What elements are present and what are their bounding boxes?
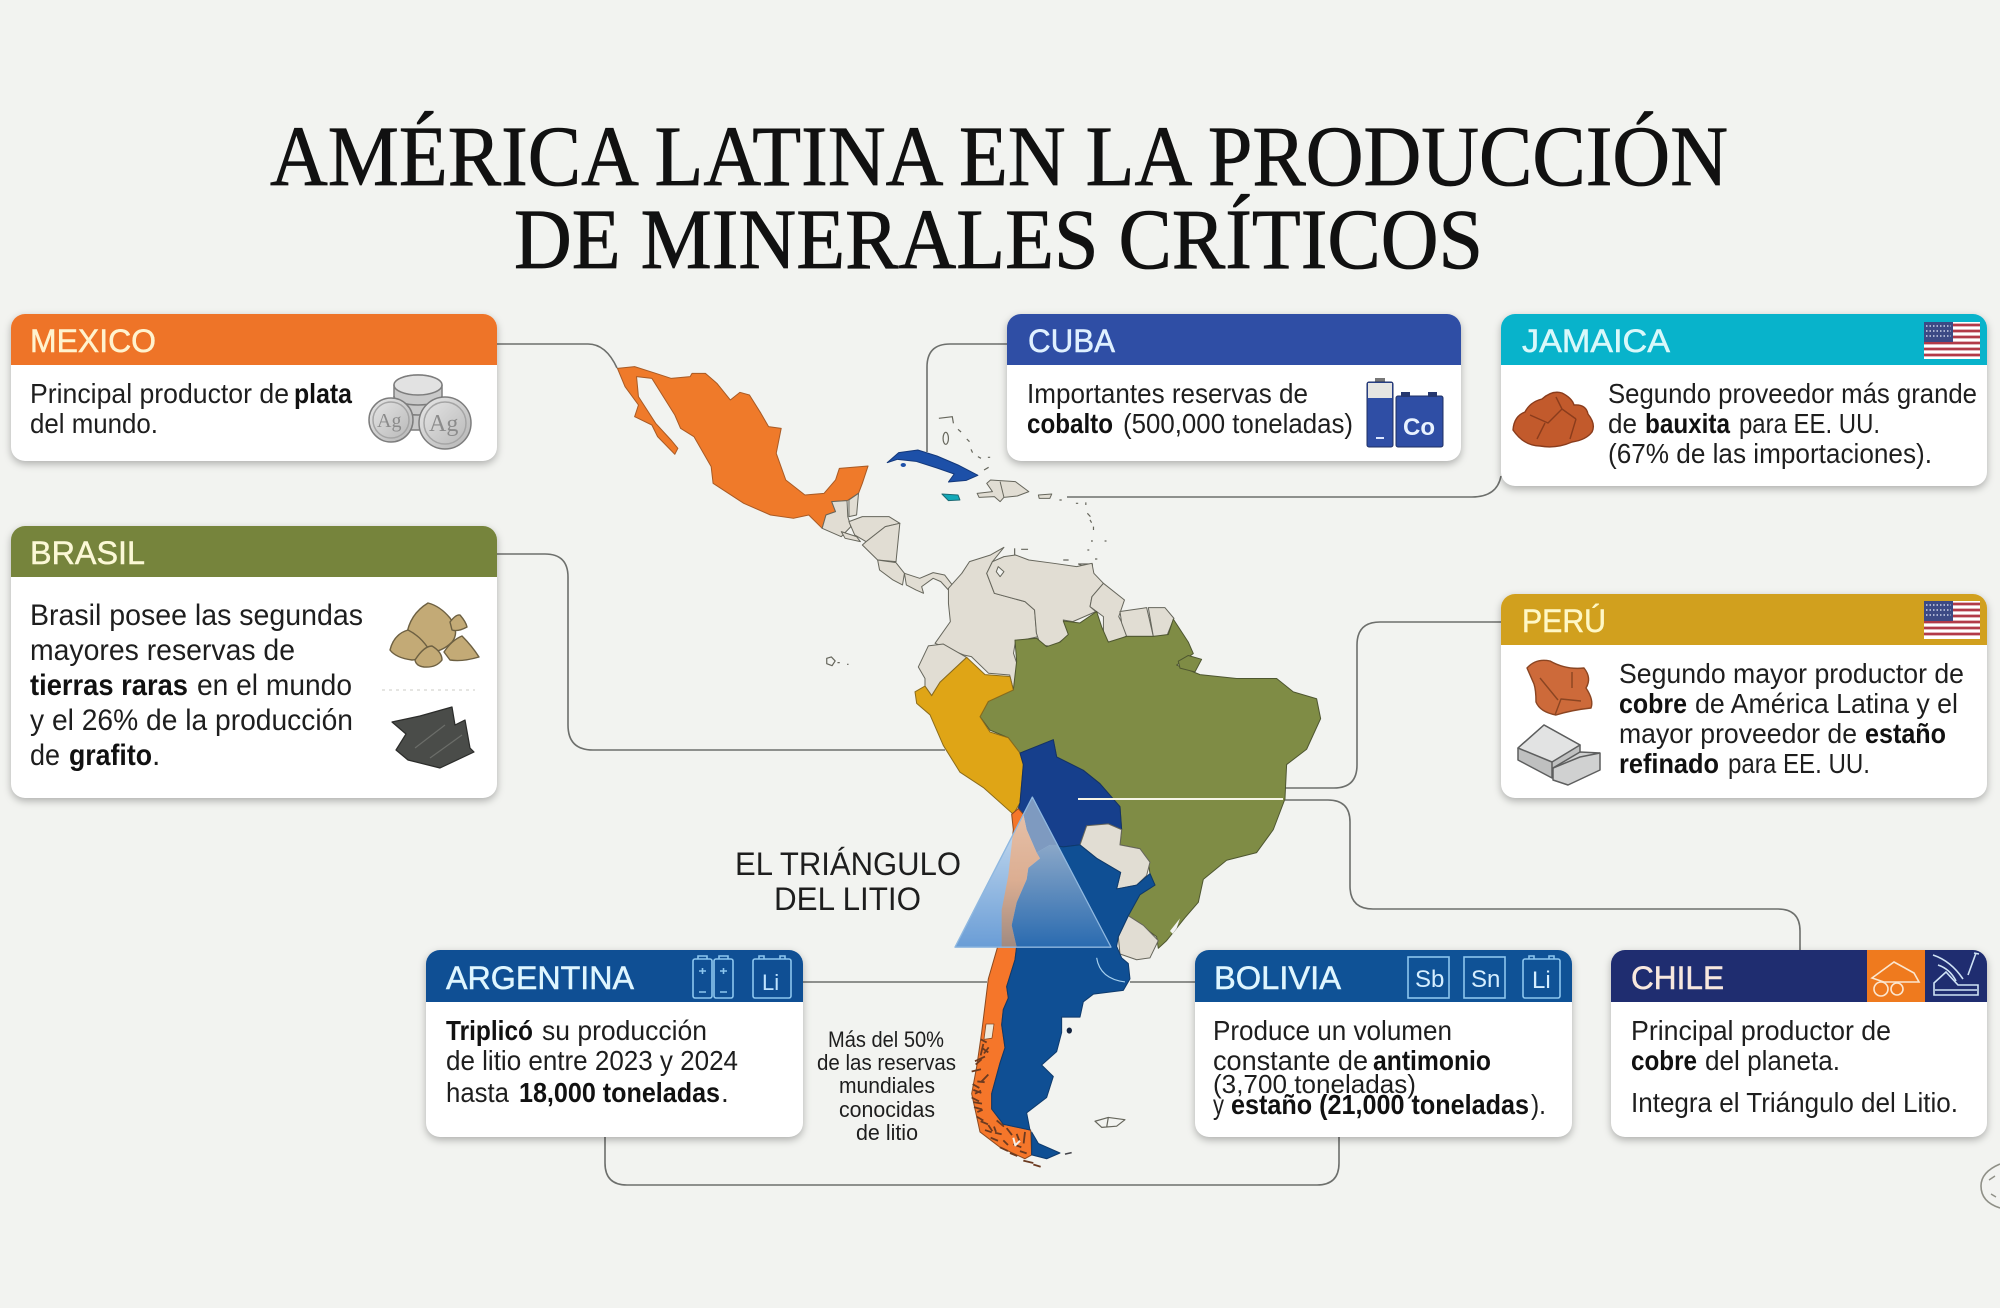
text: Chile: Principal productor de [1631, 1015, 1891, 1046]
icon: batteries [693, 956, 733, 998]
text: Brasil: de [30, 739, 60, 772]
text: Mexico: del mundo. [30, 408, 158, 439]
label: El Triángulo del Litio: DEL LITIO [774, 881, 921, 917]
note: lithium reserves: conocidas [839, 1097, 935, 1122]
heading: Brasil: BRASIL [30, 535, 145, 571]
icon: antimony [1408, 957, 1449, 998]
panel: Bolivia [1195, 950, 1572, 1137]
text: Bolivia: antimonio [1373, 1045, 1491, 1076]
note: lithium reserves: mundiales [839, 1073, 935, 1098]
text: Chile: cobre [1631, 1045, 1697, 1076]
text: Bolivia: estaño (21,000 toneladas [1231, 1089, 1529, 1120]
panel: Chile [1611, 950, 1987, 1137]
heading: Argentina: ARGENTINA [446, 960, 635, 996]
icon: cobalt batteries [1367, 378, 1443, 447]
Brazil [980, 611, 1321, 948]
Cuba [887, 450, 978, 482]
icon: lithium [1523, 956, 1560, 998]
title: AMÉRICA LATINA EN LA PRODUCCIÓN [270, 108, 1728, 204]
panel: Mexico [11, 314, 497, 461]
white overlay line on map [1078, 798, 1283, 800]
text: Perú [1619, 658, 1964, 779]
text: Mexico [30, 378, 352, 439]
text: Jamaica: bauxita [1645, 408, 1730, 439]
note: lithium reserves: Más del 50% [828, 1027, 944, 1052]
icon: silver coins: Ag [377, 410, 401, 432]
text: Mexico: plata [294, 378, 352, 409]
heading: Jamaica: JAMAICA [1522, 323, 1671, 359]
text: Perú: mayor proveedor de [1619, 718, 1857, 749]
text: Chile: Integra el Triángulo del Litio. [1631, 1087, 1958, 1118]
Chile [972, 809, 1040, 1159]
text: Argentina [446, 1015, 738, 1108]
text: Brasil: Brasil posee las segundas [30, 599, 363, 632]
text: Brasil: y el 26% de la producción [30, 704, 353, 737]
note: lithium reserves: de las reservas [817, 1050, 956, 1075]
title [270, 108, 1728, 287]
text: Brasil: en el mundo [197, 669, 352, 702]
text: Bolivia: Produce un volumen [1213, 1015, 1452, 1046]
icon: US flag [1924, 322, 1980, 359]
title: DE MINERALES CRÍTICOS [514, 191, 1483, 287]
Jamaica [942, 494, 960, 501]
panel: Cuba [1007, 314, 1461, 461]
note: lithium reserves: de litio [856, 1120, 918, 1145]
text: Mexico: Principal productor de [30, 378, 289, 409]
text: Cuba: Importantes reservas de [1027, 378, 1308, 409]
text: Argentina: de litio entre 2023 y 2024 [446, 1045, 738, 1076]
map: South America [915, 608, 1321, 1167]
text: Brasil: tierras raras [30, 669, 188, 702]
icon: antimony: Sb [1415, 966, 1444, 993]
Suriname, French Guiana, Ecuador [918, 608, 1174, 696]
icon: copper pile on orange [1867, 950, 1925, 1002]
text: Perú: para EE. UU. [1728, 748, 1870, 779]
text: Bolivia [1213, 1015, 1546, 1120]
panel: Argentina [426, 950, 803, 1137]
text: Jamaica: de [1608, 408, 1637, 439]
icon: tin: Sn [1471, 966, 1500, 993]
text: Jamaica: para EE. UU. [1739, 408, 1880, 439]
icon: lithium battery: Li [762, 970, 779, 995]
connector lines [497, 344, 1800, 1185]
icon: mining pickaxe [1933, 953, 1979, 995]
heading: Chile: CHILE [1631, 960, 1724, 996]
Chile white sliver [984, 1024, 994, 1039]
label: El Triángulo del Litio [735, 846, 961, 917]
text: Bolivia: y [1213, 1089, 1224, 1120]
text: Jamaica: Segundo proveedor más grande [1608, 378, 1977, 409]
icon: rare earths [390, 603, 479, 667]
icon: cobalt batteries: Co [1403, 414, 1435, 441]
text: Argentina: . [721, 1077, 729, 1108]
Colombia, Venezuela, Guyana, Suriname [935, 547, 1128, 690]
text: Bolivia: (3,700 toneladas) [1213, 1069, 1416, 1099]
Chilean fjords [972, 1039, 1041, 1167]
text: Chile: del planeta. [1705, 1045, 1840, 1076]
icon: lithium: Li [1532, 967, 1551, 994]
text: Perú: de América Latina y el [1695, 688, 1958, 719]
panel: Brasil [11, 526, 497, 798]
text: Brasil [30, 599, 363, 772]
text: Argentina: su producción [542, 1015, 707, 1046]
Argentina [992, 845, 1155, 1130]
text: Argentina: hasta [446, 1077, 509, 1108]
text: Cuba [1027, 378, 1353, 439]
note: lithium reserves [817, 1027, 956, 1145]
text: Perú: refinado [1619, 748, 1719, 779]
panel: Perú [1501, 594, 1987, 798]
text: Argentina: Triplicó [446, 1015, 533, 1046]
icon: lithium battery [753, 956, 791, 998]
Bolivia [1018, 740, 1122, 853]
panel: Jamaica [1501, 314, 1987, 486]
text: Perú: estaño [1865, 718, 1946, 749]
heading: Cuba: CUBA [1028, 323, 1116, 359]
Bahamas and Antilles [827, 417, 1106, 666]
icon: silver coins [369, 375, 471, 449]
Peru [915, 657, 1023, 814]
Paraguay and Uruguay [1080, 824, 1158, 960]
text: Chile [1631, 1015, 1958, 1118]
text: Perú: cobre [1619, 688, 1687, 719]
label: El Triángulo del Litio: EL TRIÁNGULO [735, 846, 961, 882]
icon: partial corner seal [1981, 1164, 2000, 1208]
divider [382, 689, 475, 691]
icon: tin ingots [1518, 725, 1600, 785]
text: Perú: Segundo mayor productor de [1619, 658, 1964, 689]
Hispaniola and Puerto Rico [977, 480, 1052, 502]
Mexico [617, 367, 868, 528]
icon: graphite [392, 707, 474, 768]
heading: Mexico: MEXICO [30, 323, 156, 359]
icon: tin [1464, 957, 1505, 998]
Central America [822, 493, 952, 593]
heading: Bolivia: BOLIVIA [1214, 960, 1342, 996]
icon: bauxite [1513, 392, 1593, 447]
icon: US flag [1924, 601, 1980, 639]
lithium triangle [955, 797, 1117, 947]
text: Brasil: grafito [69, 739, 152, 772]
text: Brasil: . [152, 739, 160, 772]
text: Argentina: 18,000 toneladas [519, 1077, 720, 1108]
text: Cuba: cobalto [1027, 408, 1113, 439]
text: Jamaica: (67% de las importaciones). [1608, 438, 1932, 469]
icon: copper [1527, 660, 1592, 715]
text: Brasil: mayores reservas de [30, 634, 295, 667]
icon: silver coins: Ag [429, 411, 458, 437]
text: Cuba: (500,000 toneladas) [1123, 408, 1353, 439]
text: Bolivia: ). [1531, 1089, 1546, 1120]
text: Bolivia: constante de [1213, 1045, 1368, 1076]
map: Mexico, Central America and Caribbean [617, 367, 1128, 690]
Falkland Islands [1095, 1117, 1125, 1127]
heading: Perú: PERÚ [1522, 603, 1606, 639]
text: Jamaica [1608, 378, 1977, 469]
